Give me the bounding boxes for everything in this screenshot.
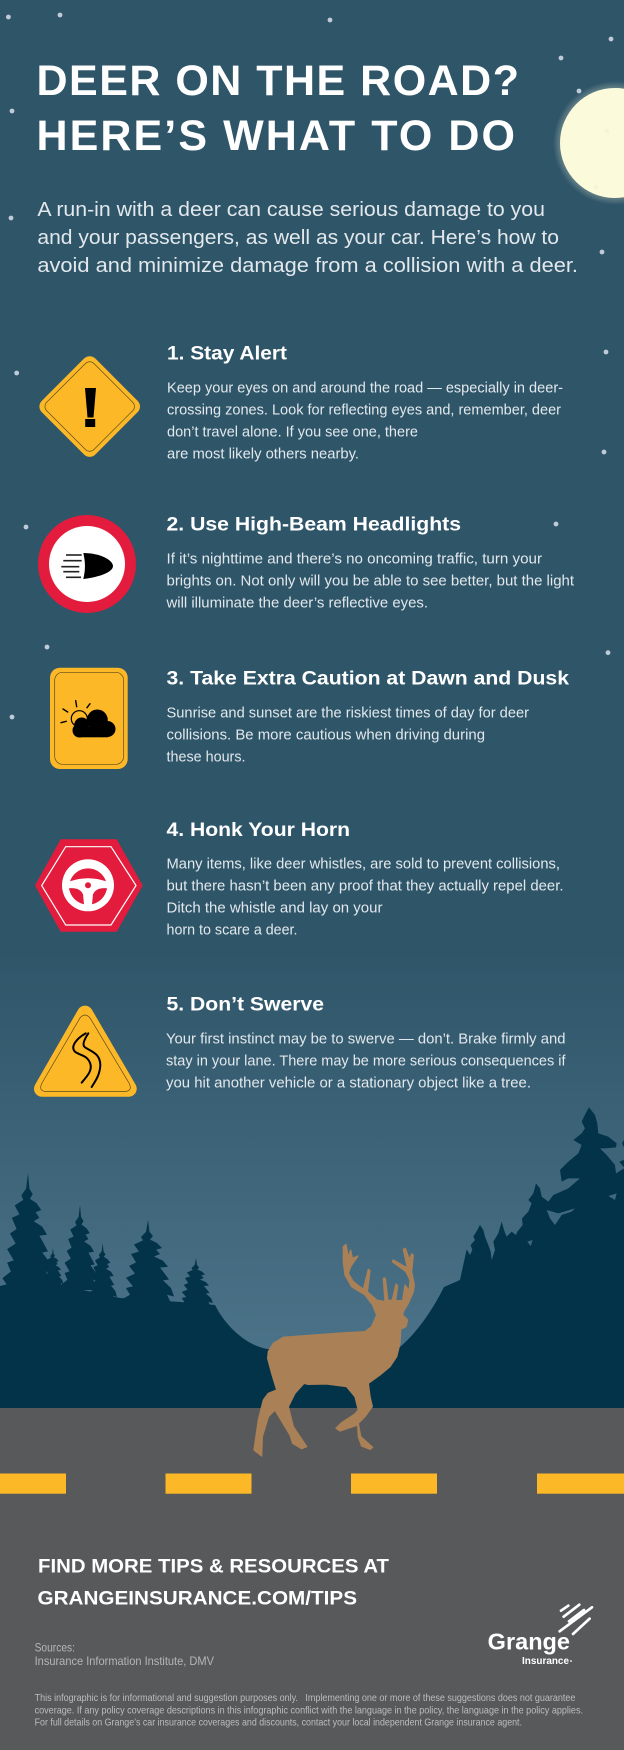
deer silhouette [254,1244,414,1456]
sources: Insurance Information Institute, DMV [35,1654,214,1668]
body 4: horn to scare a deer. [166,921,298,938]
heading 4: 4. Honk Your Horn [166,820,350,841]
tip 2: high beams [38,515,575,613]
road [0,1408,624,1750]
title: HERE’S WHAT TO DO [36,112,515,160]
call to action: FIND MORE TIPS & RESOURCES AT [38,1556,389,1578]
disclaimer [35,1693,583,1728]
tip 5: don't swerve [41,995,566,1092]
intro text [37,199,578,277]
intro text: and your passengers, as well as your car. Here’s how to [37,227,559,249]
tip 3: dawn and dusk [50,668,569,769]
heading 2: 2. Use High-Beam Headlights [166,515,461,536]
icon: winding road triangle [41,1014,130,1092]
sources: Sources: [35,1641,75,1655]
body 5 [166,1030,566,1091]
body 4: Ditch the whistle and lay on your [166,899,382,916]
heading 1: 1. Stay Alert [167,344,288,364]
call to action: GRANGEINSURANCE.COM/TIPS [38,1588,357,1610]
title: DEER ON THE ROAD? [36,57,519,105]
sources [35,1641,214,1668]
body 1: crossing zones. Look for reflecting eyes and, remember, deer [167,401,561,418]
heading 5: 5. Don’t Swerve [166,995,324,1016]
disclaimer: For full details on Grange’s car insurance coverages and discounts, contact your local independent Grange insurance agent. [35,1717,522,1728]
body 3 [166,704,529,765]
body 5: Your first instinct may be to swerve — don’t. Brake firmly and [166,1030,566,1047]
tip 4: honk [35,820,564,938]
body 3: collisions. Be more cautious when driving during [166,726,485,743]
body 1: don’t travel alone. If you see one, there [167,423,418,440]
road dashes [0,1474,624,1494]
body 4 [166,855,564,938]
stars [6,13,613,719]
body 3: these hours. [166,748,246,765]
forest hills and trees [0,1107,624,1420]
body 5: you hit another vehicle or a stationary object like a tree. [166,1074,531,1091]
intro text: A run-in with a deer can cause serious damage to you [37,199,545,221]
tip 1: stay alert [36,344,563,462]
heading 3: 3. Take Extra Caution at Dawn and Dusk [166,669,569,690]
icon: sun and cloud sign [50,668,128,769]
body 4: but there hasn’t been any proof that they actually repel deer. [166,877,564,894]
logo: Grange Insurance [488,1605,592,1667]
body 2: If it’s nighttime and there’s no oncoming traffic, turn your [166,550,542,567]
body 3: Sunrise and sunset are the riskiest times of day for deer [166,704,529,721]
body 5: stay in your lane. There may be more serious consequences if [166,1052,566,1069]
body 2 [166,550,575,611]
body 1: are most likely others nearby. [167,445,359,462]
intro text: avoid and minimize damage from a collision with a deer. [37,255,578,277]
body 2: will illuminate the deer’s reflective eyes. [166,594,428,611]
icon: headlight sign [38,515,136,613]
title [36,57,519,160]
body 1 [167,379,563,462]
logo: Grange Insurance: Grange [488,1628,570,1654]
icon: steering wheel hexagon [35,839,143,932]
icon: warning diamond [36,353,143,460]
body 1: Keep your eyes on and around the road — especially in deer- [167,379,563,396]
call to action [38,1556,389,1610]
logo: Grange Insurance: Insurance [522,1656,569,1667]
body 2: brights on. Not only will you be able to see better, but the light [166,572,575,589]
body 4: Many items, like deer whistles, are sold to prevent collisions, [166,855,560,872]
moon [553,81,624,205]
